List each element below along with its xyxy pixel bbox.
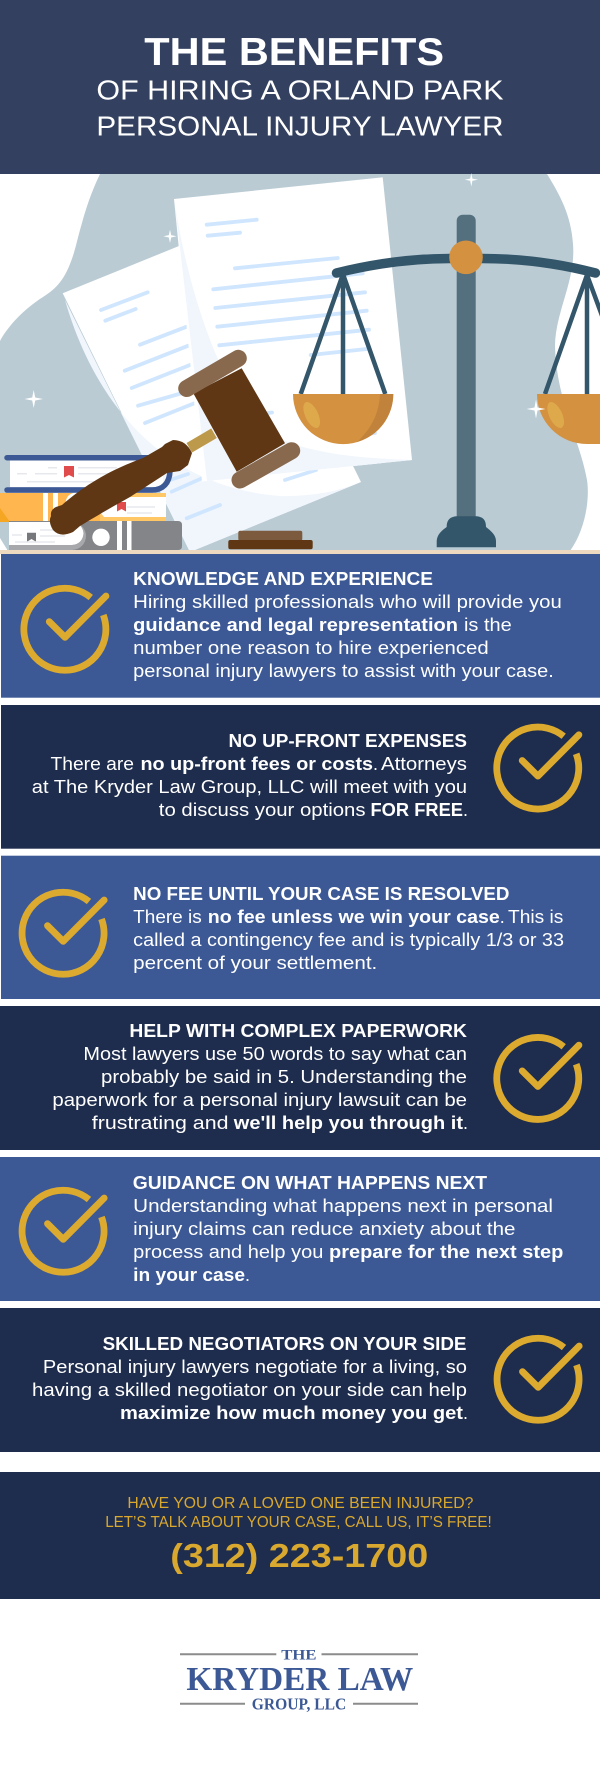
body text [133,1196,563,1285]
background blob [0,174,588,551]
icon: gold check circle [24,588,106,670]
body text [32,754,468,820]
subtitle line 1: OF HIRING A ORLAND PARK [96,74,504,105]
phone number: (312) 223-1700 [170,1538,428,1575]
panel: skilled negotiators [0,1308,600,1452]
panel: help with complex paperwork [0,1006,600,1150]
logo word: group, llc: GROUP, LLC [252,1694,346,1713]
body text [52,1044,468,1133]
body text: frustrating and [92,1113,228,1133]
body text: Most lawyers use 50 words to say what can [83,1044,467,1064]
heading: KNOWLEDGE AND EXPERIENCE [133,569,433,589]
body text: . [245,1265,250,1285]
heading: NO UP-FRONT EXPENSES [228,731,467,751]
scales of justice [293,215,600,547]
body text: called a contingency fee and is typically 1/3 or 33 [133,930,564,950]
subtitle line 2: PERSONAL INJURY LAWYER [96,111,504,142]
heading: GUIDANCE ON WHAT HAPPENS NEXT [133,1173,487,1193]
logo word: the: THE [281,1648,316,1664]
heading: NO FEE UNTIL YOUR CASE IS RESOLVED [133,884,509,904]
body text: personal injury lawyers to assist with your case. [133,661,554,681]
body text: maximize how much money you get [120,1403,463,1423]
body text: prepare for the next step [329,1242,563,1262]
body text: to discuss your options [159,800,366,820]
call to action line 1: HAVE YOU OR A LOVED ONE BEEN INJURED? [127,1495,474,1512]
icon: gold check circle [22,892,104,974]
icon: gold check circle [497,727,579,809]
body text: Hiring skilled professionals who will provide you [133,592,562,612]
body text: guidance and legal representation [133,615,458,635]
body text: in your case [133,1265,245,1285]
icon: gold check circle [22,1190,104,1272]
body text: . [463,1403,468,1423]
floor line [0,550,600,554]
body text [32,1357,468,1423]
hero illustration [0,173,600,554]
gavel [50,358,292,535]
body text: . [373,754,378,774]
panel: no up-front expenses [1,705,600,849]
body text: Attorneys [381,754,467,774]
body text: no fee unless we win your case [208,907,500,927]
panel: no fee until resolved [1,856,600,999]
call to action line 2: LET’S TALK ABOUT YOUR CASE, CALL US, IT’S FREE! [105,1514,492,1531]
front document [174,177,412,482]
body text: This is [508,907,563,927]
heading: SKILLED NEGOTIATORS ON YOUR SIDE [103,1334,466,1354]
body text: process and help you [133,1242,323,1262]
body text: Personal injury lawyers negotiate for a living, so [43,1357,467,1377]
body text: having a skilled negotiator on your side can help [32,1380,467,1400]
panel: knowledge and experience [1,554,600,698]
body text: . [463,800,468,820]
back document [63,224,361,552]
body text: injury claims can reduce anxiety about the [133,1219,515,1239]
body text: no up-front fees or costs [140,754,373,774]
title: THE BENEFITS [144,31,444,74]
books stack [0,458,182,550]
body text: There are [50,754,134,774]
body text: probably be said in 5. Understanding the [101,1067,467,1087]
body text: is the [464,615,512,635]
call to action panel [0,1472,600,1599]
body text: FOR FREE [370,800,463,820]
body text: . [463,1113,468,1133]
panel: guidance on what happens next [0,1157,600,1301]
body text: Understanding what happens next in personal [133,1196,553,1216]
body text: . [500,907,505,927]
sparkles [24,173,478,408]
gavel sound block [228,531,313,549]
body text [133,907,564,973]
body text [133,592,562,681]
header banner [0,0,600,174]
logo word: kryder law: KRYDER LAW [186,1661,413,1698]
body text: There is [133,907,202,927]
icon: gold check circle [497,1037,579,1119]
logo: The Kryder Law Group, LLC [180,1648,418,1713]
icon: gold check circle [497,1338,579,1420]
heading: HELP WITH COMPLEX PAPERWORK [129,1021,467,1041]
body text: paperwork for a personal injury lawsuit can be [52,1090,467,1110]
body text: percent of your settlement. [133,953,377,973]
body text: we'll help you through it [233,1113,463,1133]
body text: at The Kryder Law Group, LLC will meet with you [32,777,467,797]
body text: number one reason to hire experienced [133,638,489,658]
